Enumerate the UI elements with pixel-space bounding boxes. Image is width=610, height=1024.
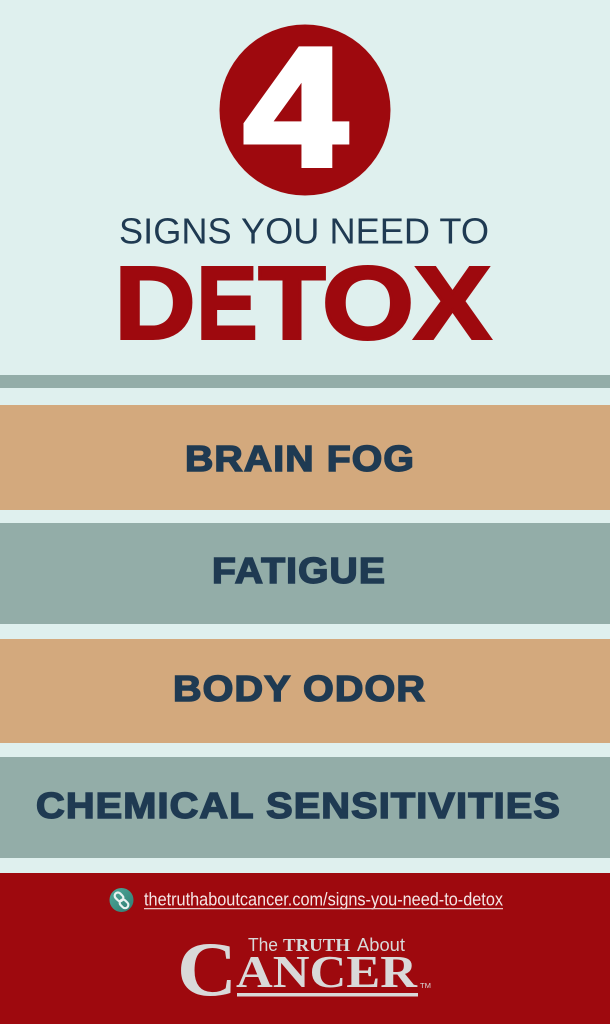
logo: the truth about cancer: The xyxy=(248,935,278,955)
logo: the truth about cancer: C xyxy=(177,926,237,1012)
logo: the truth about cancer xyxy=(177,926,431,1012)
panel: brain fog xyxy=(0,405,610,510)
logo: the truth about cancer: About xyxy=(357,935,405,955)
footer panel xyxy=(0,873,610,1024)
panel: chemical sensitivities xyxy=(0,757,610,858)
panel: body odor xyxy=(0,639,610,743)
heading: detox: E xyxy=(196,246,258,360)
badge: number 4: 4 xyxy=(244,13,347,201)
heading: detox: X xyxy=(414,246,491,360)
panel: fatigue xyxy=(0,523,610,624)
link text: thetruthaboutcancer.com/signs-you-need-to-detox xyxy=(144,890,503,910)
label: fatigue: FATIGUE xyxy=(212,550,386,591)
heading: detox: T xyxy=(258,246,326,360)
logo: the truth about cancer: TM xyxy=(420,983,431,990)
header panel xyxy=(114,13,491,360)
badge: number 4 xyxy=(220,13,390,201)
label: brain fog: BRAIN FOG xyxy=(185,438,415,479)
label: chemical sensitivities: CHEMICAL SENSITIVITIES xyxy=(36,785,561,826)
heading: detox: O xyxy=(322,246,414,360)
icon: link xyxy=(110,888,134,912)
label: body odor: BODY ODOR xyxy=(173,668,426,709)
heading: detox: D xyxy=(114,246,196,360)
divider bar xyxy=(0,375,610,388)
logo: the truth about cancer: TRUTH xyxy=(283,935,350,955)
logo: the truth about cancer: ANCER xyxy=(236,946,418,997)
heading: signs you need to: SIGNS YOU NEED TO xyxy=(119,210,489,252)
